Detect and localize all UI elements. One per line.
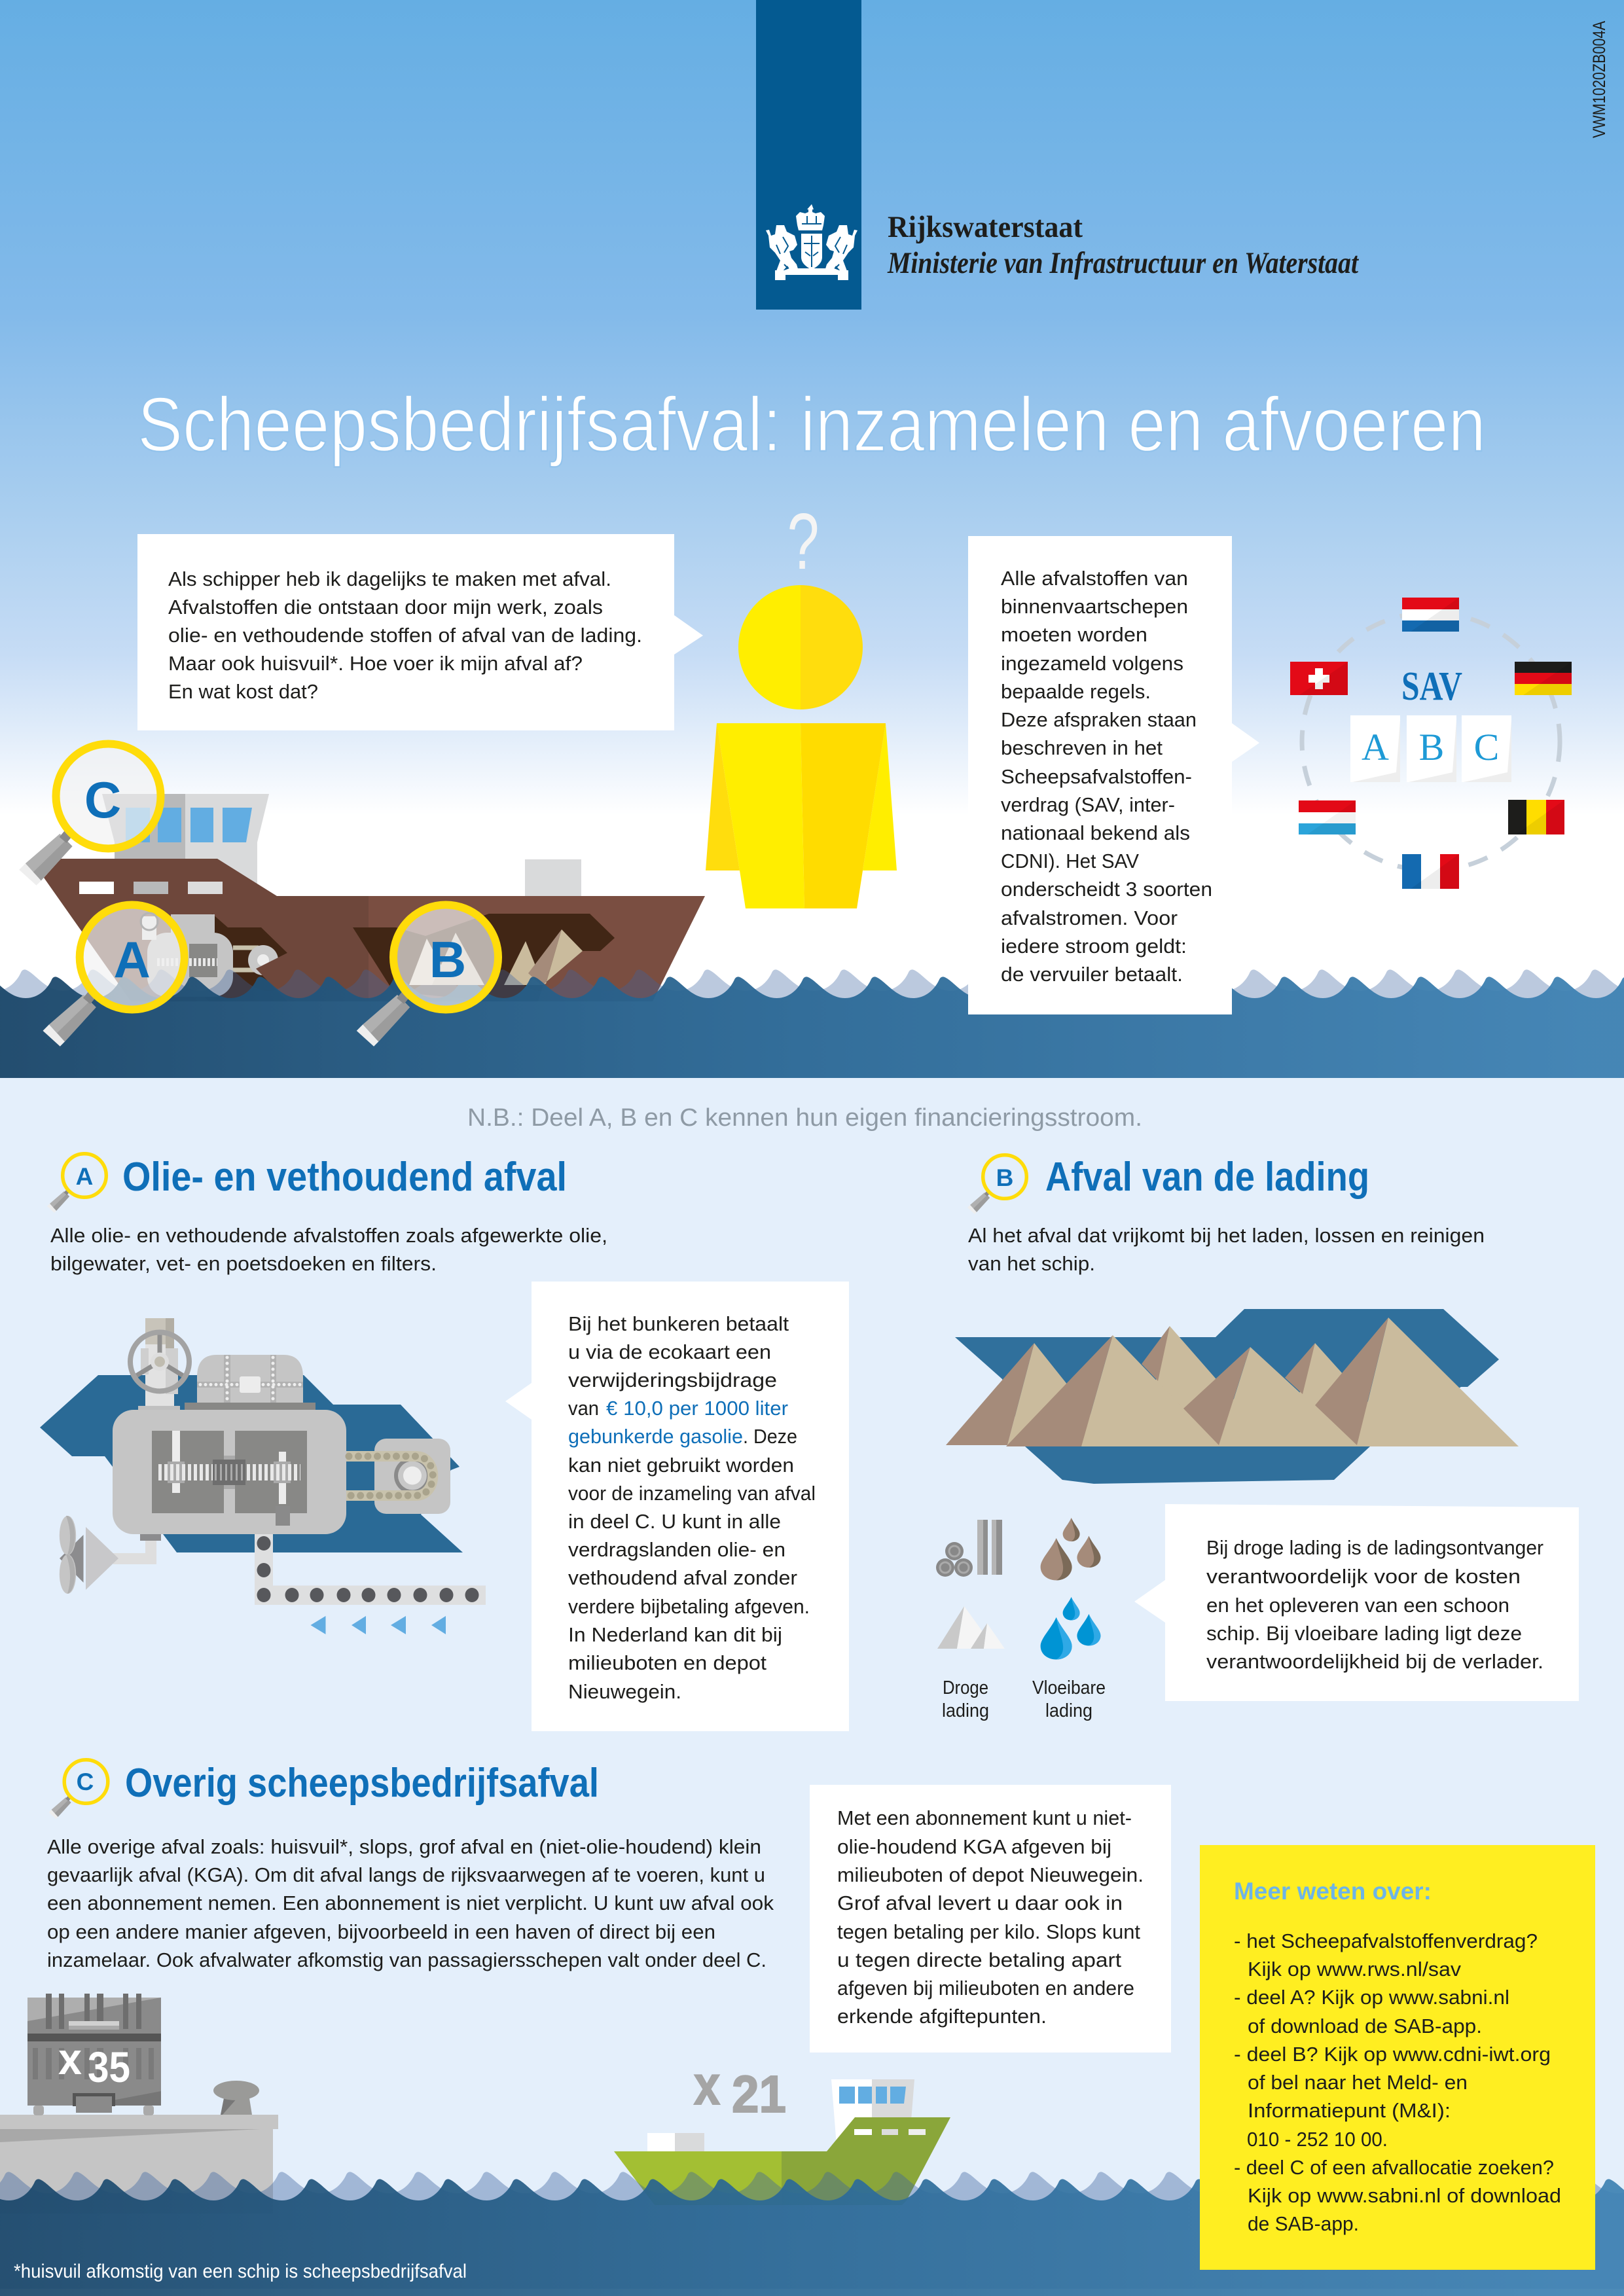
illustration: cargo heaps — [946, 1309, 1519, 1484]
panel list: of download de SAB-app. — [1248, 2015, 1482, 2037]
ship: brown vessel — [44, 794, 705, 1001]
waves: bottom sea — [0, 2172, 1624, 2296]
payment text: van — [568, 1397, 599, 1420]
icon: waste container x 35 — [27, 1994, 161, 2115]
SAV text: iedere stroom geldt: — [1001, 935, 1187, 958]
subscription text: afgeven bij milieuboten en andere — [837, 1977, 1134, 2000]
funnel — [525, 859, 581, 896]
dome — [185, 1355, 316, 1410]
subscription text: milieuboten of depot Nieuwegein. — [837, 1863, 1144, 1886]
SAV text: bepaalde regels. — [1001, 680, 1151, 703]
SAV diagram — [1290, 598, 1572, 889]
skipper text: Maar ook huisvuil*. Hoe voer ik mijn afval af? — [168, 652, 583, 675]
heading text: Overig scheepsbedrijfsafval — [125, 1761, 599, 1806]
SAV label: SAV — [1401, 664, 1462, 709]
card A: A — [1362, 726, 1389, 768]
SAV text: beschreven in het — [1001, 736, 1163, 759]
SAV text: onderscheidt 3 soorten — [1001, 878, 1212, 901]
card B: B — [1419, 726, 1444, 768]
skipper text: En wat kost dat? — [168, 680, 318, 703]
icon: coat of arms — [766, 204, 857, 280]
subscription text: u tegen directe betaling apart — [837, 1948, 1121, 1971]
panel list: of bel naar het Meld- en — [1248, 2071, 1468, 2094]
label: vloeibare lading: Vloeibare — [1032, 1677, 1106, 1698]
panel list: - deel B? Kijk op www.cdni-iwt.org — [1234, 2043, 1551, 2066]
ministry name line 1: Rijkswaterstaat — [888, 210, 1083, 244]
icon: person — [706, 585, 897, 908]
subscription text: Met een abonnement kunt u niet- — [837, 1806, 1132, 1829]
callout: subscription — [810, 1785, 1171, 2053]
SAV text: afvalstromen. Voor — [1001, 906, 1178, 929]
icon: brown drops — [1041, 1518, 1100, 1580]
multiplier x 21: 21 — [732, 2065, 786, 2123]
section C intro: gevaarlijk afval (KGA). Om dit afval langs de rijksvaarwegen af te voeren, kunt u — [47, 1863, 765, 1886]
payment text: € 10,0 per 1000 liter — [606, 1397, 788, 1420]
SAV text — [1001, 567, 1212, 986]
SAV text: moeten worden — [1001, 623, 1147, 646]
cargo icons — [936, 1518, 1106, 1721]
payment text: in deel C. U kunt in alle — [568, 1510, 781, 1533]
icon: magnifier A: A — [76, 1163, 93, 1190]
heading text: Olie- en vethoudend afval — [122, 1155, 567, 1200]
card B — [1407, 715, 1456, 782]
panel list: - het Scheepafvalstoffenverdrag? — [1234, 1929, 1538, 1952]
label: droge lading — [942, 1677, 989, 1721]
label: vloeibare lading: lading — [1045, 1700, 1092, 1721]
waves: top sea — [0, 969, 1624, 1094]
heading text: Afval van de lading — [1045, 1155, 1369, 1200]
section B heading — [967, 1155, 1369, 1214]
section C intro: inzamelaar. Ook afvalwater afkomstig van passagiersschepen valt onder deel C. — [47, 1948, 767, 1971]
flag: Belgium — [1508, 800, 1564, 834]
sky background — [0, 0, 1624, 1078]
section B intro: van het schip. — [968, 1252, 1095, 1275]
panel list: - deel C of een afvallocatie zoeken? — [1234, 2156, 1554, 2179]
payment text: voor de inzameling van afval — [568, 1482, 816, 1505]
panel list: Informatiepunt (M&I): — [1248, 2099, 1451, 2122]
illustration: engine — [40, 1318, 486, 1634]
logo band — [756, 0, 861, 310]
icon: magnifier A — [47, 1154, 106, 1213]
section C intro — [47, 1835, 774, 1971]
pipe and propeller — [60, 1516, 161, 1594]
panel list: Kijk op www.rws.nl/sav — [1248, 1958, 1462, 1981]
skipper text: Als schipper heb ik dagelijks te maken met afval. — [168, 567, 611, 590]
dashed circle — [1302, 613, 1560, 870]
section C intro: een abonnement nemen. Een abonnement is niet verplicht. U kunt uw afval ook — [47, 1892, 774, 1914]
subscription text: erkende afgiftepunten. — [837, 2005, 1047, 2028]
icon: bollard — [213, 2081, 259, 2115]
SAV text: nationaal bekend als — [1001, 821, 1190, 844]
icon: waste container x 35: x — [58, 2034, 82, 2084]
conveyor — [255, 1534, 486, 1605]
chain drive — [346, 1439, 450, 1514]
flow arrows — [310, 1616, 446, 1634]
callout: skipper question — [137, 534, 703, 730]
panel list: - deel A? Kijk op www.sabni.nl — [1234, 1986, 1509, 2009]
SAV text: verdrag (SAV, inter- — [1001, 793, 1175, 816]
magnifier: B on ship — [357, 905, 498, 1047]
payment text: verdere bijbetaling afgeven. — [568, 1595, 810, 1618]
SAV text: binnenvaartschepen — [1001, 595, 1188, 618]
skipper text: Afvalstoffen die ontstaan door mijn werk, zoals — [168, 596, 603, 619]
skipper text — [168, 567, 642, 703]
flag: Germany — [1515, 662, 1572, 695]
section C heading — [48, 1760, 599, 1819]
subscription text: olie-houdend KGA afgeven bij — [837, 1835, 1111, 1858]
icon: waste container x 35: 35 — [88, 2043, 130, 2091]
section A intro: bilgewater, vet- en poetsdoeken en filters. — [50, 1252, 437, 1275]
payment text: Nieuwegein. — [568, 1680, 681, 1703]
panel list: de SAB-app. — [1248, 2212, 1359, 2235]
icon: magnifier C: C — [77, 1768, 94, 1795]
subscription text — [837, 1806, 1144, 2028]
skipper text: olie- en vethoudende stoffen of afval van de lading. — [168, 624, 642, 647]
responsibility text: schip. Bij vloeibare lading ligt deze — [1206, 1622, 1522, 1645]
ministry name line 2: Ministerie van Infrastructuur en Waterstaat — [887, 246, 1360, 280]
hull — [44, 859, 369, 1001]
card C — [1462, 715, 1511, 782]
panel list: Kijk op www.sabni.nl of download — [1248, 2184, 1561, 2207]
payment text: Bij het bunkeren betaalt — [568, 1312, 789, 1335]
responsibility text: Bij droge lading is de ladingsontvanger — [1206, 1536, 1543, 1559]
SAV text: ingezameld volgens — [1001, 652, 1183, 675]
flag: France — [1402, 854, 1459, 889]
flag: Switzerland — [1290, 662, 1348, 695]
responsibility text: verantwoordelijkheid bij de verlader. — [1206, 1650, 1543, 1673]
icon: blue drops — [1041, 1597, 1100, 1660]
gearbox — [152, 1431, 307, 1526]
payment text: vethoudend afval zonder — [568, 1566, 797, 1589]
multiplier x 21 — [694, 2054, 786, 2123]
engine body — [113, 1410, 346, 1534]
payment text — [568, 1312, 816, 1703]
SAV text: CDNI). Het SAV — [1001, 850, 1139, 872]
label: droge lading: Droge — [943, 1677, 988, 1698]
hull windows — [79, 882, 114, 894]
responsibility text — [1206, 1536, 1543, 1673]
note: N.B.: Deel A, B en C kennen hun eigen financieringsstroom. — [467, 1104, 1142, 1132]
payment text: gebunkerde gasolie — [568, 1425, 743, 1448]
icon: magnifier C — [48, 1760, 108, 1819]
magnifier: A on ship: A — [114, 931, 151, 988]
payment text: verdragslanden olie- en — [568, 1538, 785, 1561]
question mark: ? — [787, 497, 819, 586]
SAV text: Alle afvalstoffen van — [1001, 567, 1188, 590]
ship: green vessel — [614, 2079, 950, 2205]
section A intro — [50, 1224, 607, 1275]
panel list: 010 - 252 10 00. — [1247, 2128, 1388, 2151]
blue background shape — [40, 1375, 463, 1552]
multiplier x 21: x — [694, 2054, 720, 2116]
subscription text: Grof afval levert u daar ook in — [837, 1892, 1123, 1914]
engine room cutaway — [147, 914, 308, 1001]
exhaust pipe and valve wheel — [130, 1318, 189, 1410]
subscription text: tegen betaling per kilo. Slops kunt — [837, 1920, 1140, 1943]
cargo hold cutaway — [353, 914, 615, 1001]
callout: section A payment — [505, 1282, 849, 1731]
icon: magnifier B: B — [996, 1164, 1013, 1191]
responsibility text: en het opleveren van een schoon — [1206, 1594, 1509, 1617]
flag: Netherlands — [1402, 598, 1459, 632]
magnifier: A on ship — [43, 905, 185, 1047]
magnifier: B on ship: B — [429, 931, 466, 988]
payment text: . Deze — [743, 1425, 797, 1448]
magnifier: C on ship — [19, 744, 161, 886]
callout: SAV explanation — [968, 536, 1259, 1014]
SAV text: Scheepsafvalstoffen- — [1001, 765, 1192, 788]
flag: Luxembourg — [1299, 800, 1356, 834]
logo text — [887, 210, 1360, 280]
panel: more information — [1200, 1845, 1595, 2270]
bridge superstructure — [102, 794, 269, 903]
section A intro: Alle olie- en vethoudende afvalstoffen zoals afgewerkte olie, — [50, 1224, 607, 1247]
section C intro: Alle overige afval zoals: huisvuil*, slops, grof afval en (niet-olie-houdend) klein — [47, 1835, 761, 1858]
blue background shape — [955, 1309, 1499, 1484]
SAV text: de vervuiler betaalt. — [1001, 963, 1183, 986]
icon: logs and planks — [936, 1520, 1002, 1577]
icon: magnifier B — [967, 1155, 1026, 1214]
label: droge lading: lading — [942, 1700, 989, 1721]
card A — [1350, 715, 1400, 782]
footnote: *huisvuil afkomstig van een schip is scheepsbedrijfsafval — [14, 2261, 467, 2282]
quay — [0, 2115, 278, 2214]
responsibility text: verantwoordelijk voor de kosten — [1206, 1565, 1521, 1588]
SAV text: Deze afspraken staan — [1001, 708, 1197, 731]
payment text: kan niet gebruikt worden — [568, 1454, 794, 1477]
payment text: milieuboten en depot — [568, 1651, 767, 1674]
icon: white heaps — [937, 1606, 1005, 1649]
magnifier: C on ship: C — [84, 771, 121, 829]
payment text: verwijderingsbijdrage — [568, 1369, 777, 1391]
payment text: u via de ecokaart een — [568, 1340, 771, 1363]
label: vloeibare lading — [1032, 1677, 1106, 1721]
section background — [0, 1078, 1624, 2230]
panel list — [1234, 1929, 1561, 2235]
section A heading — [47, 1154, 567, 1213]
section B intro: Al het afval dat vrijkomt bij het laden, lossen en reinigen — [968, 1224, 1485, 1247]
callout: section B responsibility — [1134, 1504, 1579, 1701]
payment text: In Nederland kan dit bij — [568, 1623, 782, 1646]
section B intro — [968, 1224, 1485, 1275]
panel heading: Meer weten over: — [1234, 1878, 1432, 1905]
section C intro: op een andere manier afgeven, bijvoorbeeld in een haven of direct bij een — [47, 1920, 715, 1943]
card C: C — [1474, 726, 1499, 768]
